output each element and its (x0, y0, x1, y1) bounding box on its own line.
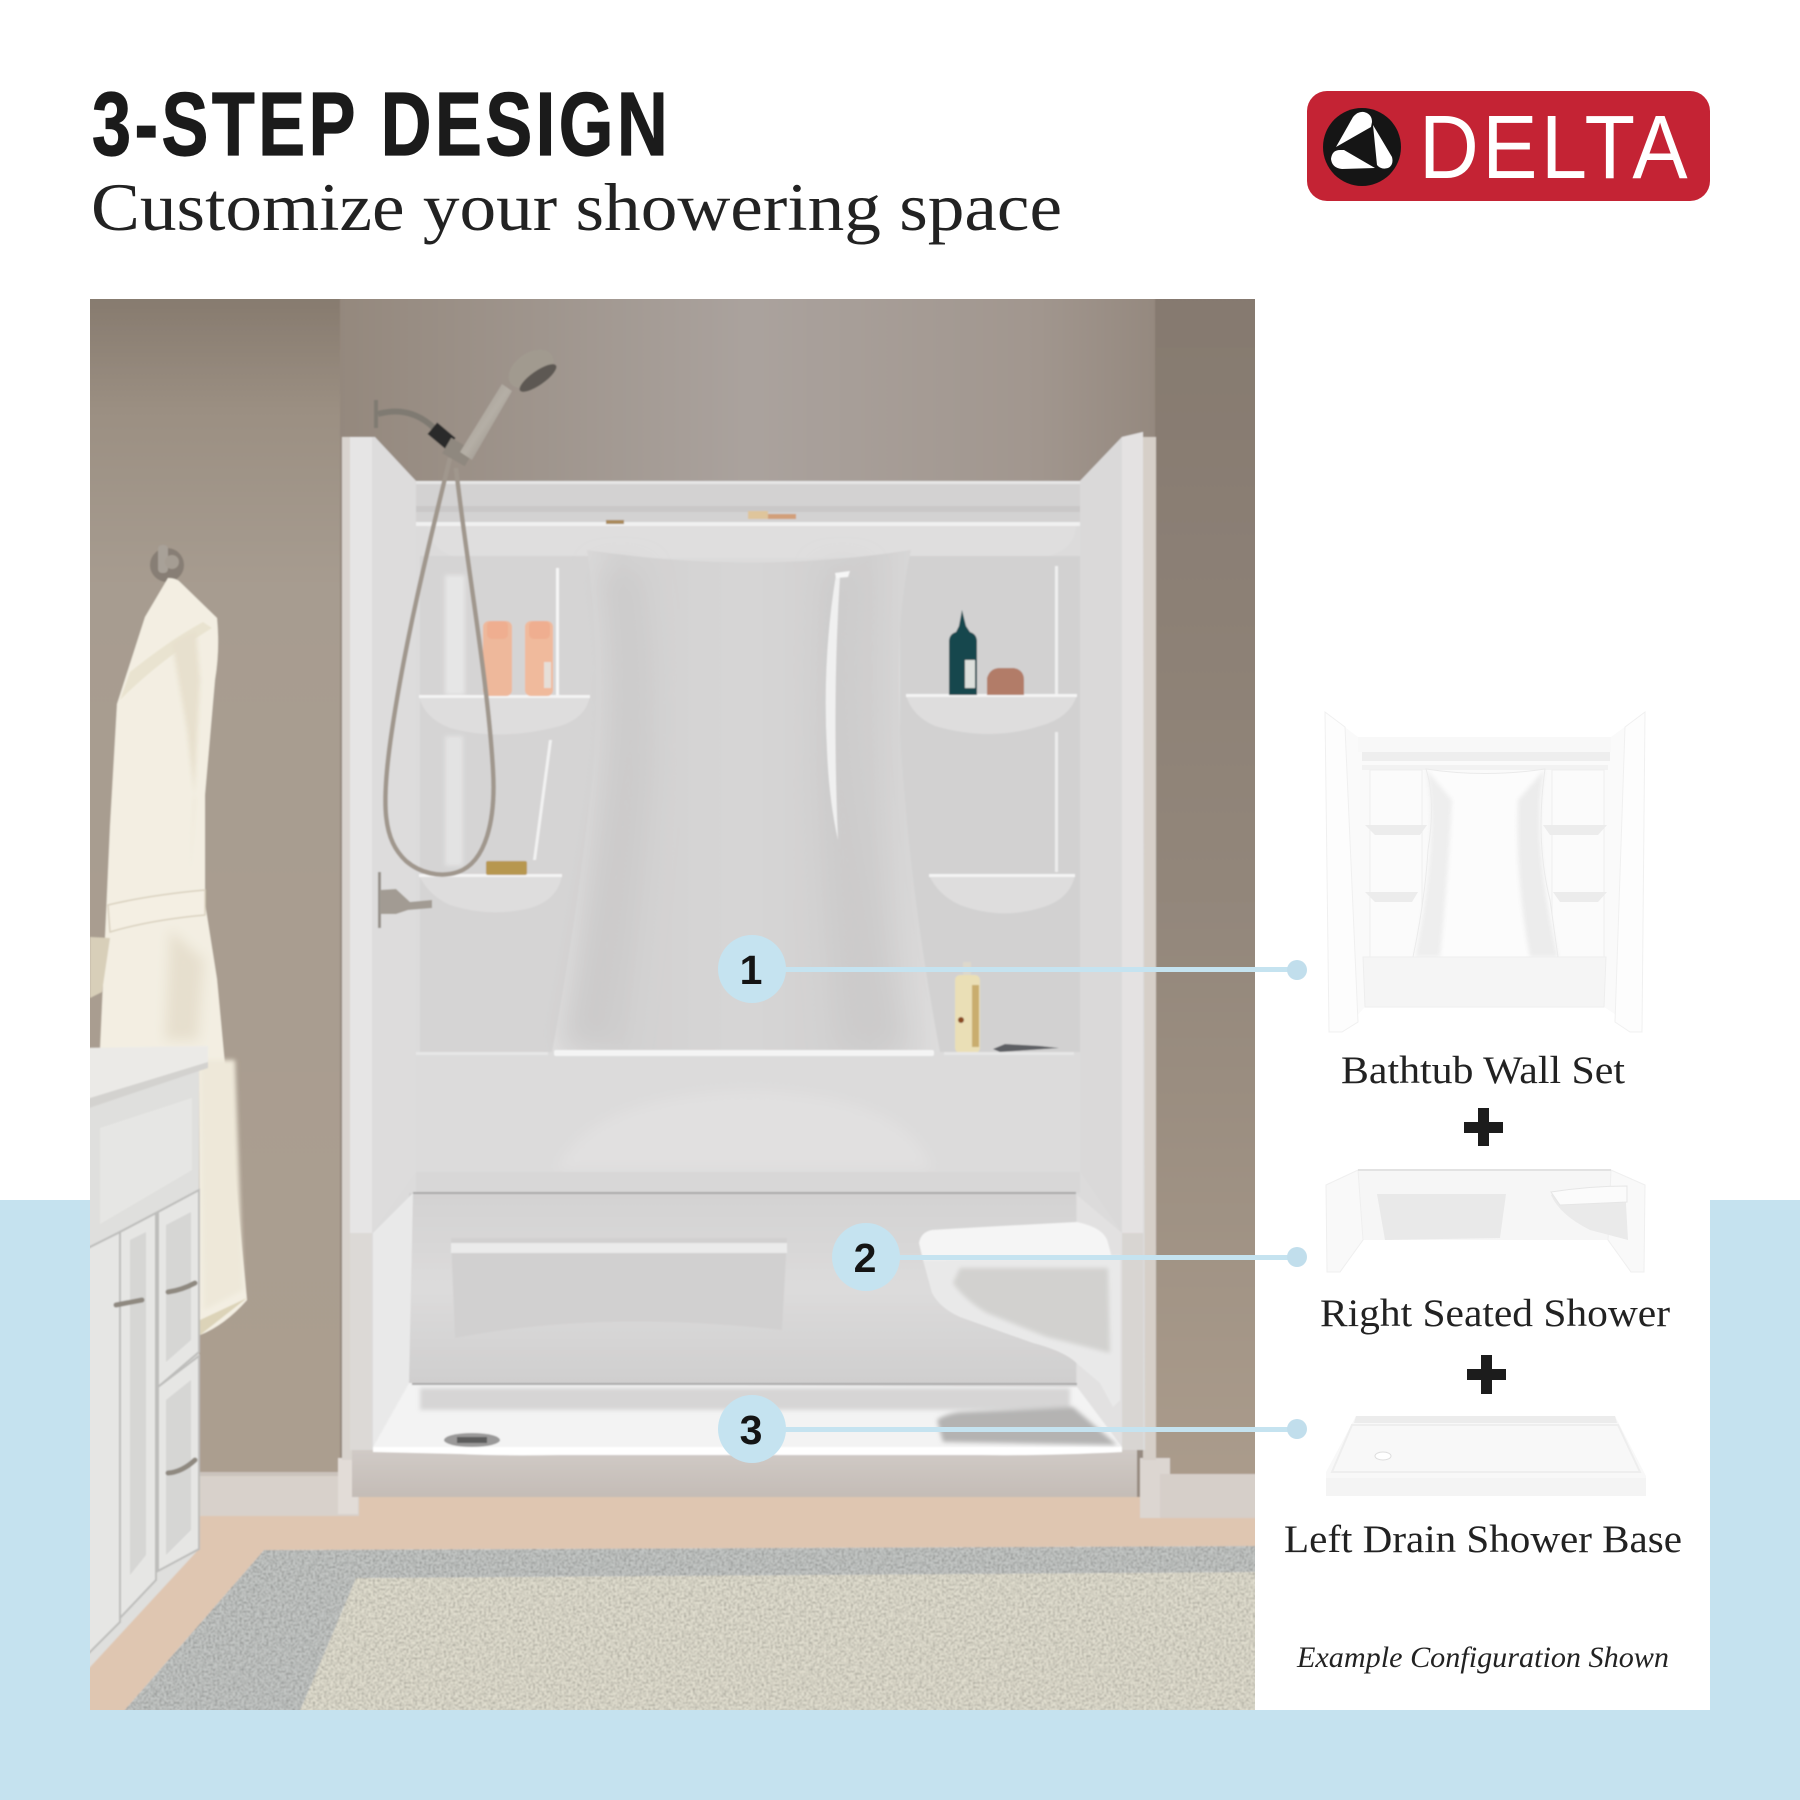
logo mark (1323, 108, 1401, 186)
panel highlights (566, 570, 850, 1046)
product: left drain shower base (1326, 1416, 1646, 1496)
right wall (1155, 299, 1255, 1475)
shower head (501, 342, 561, 396)
callout 2: 2 (854, 1235, 876, 1281)
label: right seated shower: Right Seated Shower (1320, 1292, 1670, 1335)
seat shower section (373, 1192, 1122, 1447)
handle (460, 384, 512, 460)
teal bottle (949, 610, 977, 695)
razor (993, 1044, 1059, 1052)
right flange (1122, 432, 1143, 1450)
hair clip (987, 668, 1024, 695)
left wall (80, 290, 345, 1500)
subtitle: Customize your showering space (91, 169, 1062, 245)
Delta logo (1307, 91, 1710, 201)
drain (444, 1433, 500, 1447)
vanity handles (116, 1283, 195, 1473)
shower base (352, 1383, 1137, 1497)
seat top (919, 1222, 1112, 1260)
light blue background band (0, 1200, 1800, 1800)
alcoves (1370, 770, 1422, 957)
bottles on upper left shelf (483, 621, 553, 696)
shelf left upper (419, 695, 590, 735)
back recess (451, 1238, 787, 1338)
shelf right lower (929, 874, 1075, 913)
items on ledge (767, 513, 797, 520)
vanity (80, 1046, 208, 1678)
robe on hook (90, 545, 247, 1335)
hook (150, 545, 184, 582)
label: left drain shower base: Left Drain Shower Base (1284, 1518, 1682, 1561)
shelf left lower (419, 874, 562, 912)
left alcove (460, 557, 586, 558)
outer trim (342, 437, 1156, 1460)
callout 3: 3 (740, 1407, 762, 1453)
shower hose (385, 458, 494, 875)
robe belt (108, 890, 205, 932)
plus sign 2 (1467, 1355, 1506, 1394)
vanity doors and drawers (80, 1190, 199, 1662)
collar (428, 423, 474, 466)
right return panel (1077, 1195, 1122, 1447)
baseboards (199, 1458, 1265, 1518)
left side wall (372, 437, 416, 1233)
panel: bathroom photo (80, 290, 1265, 1720)
callout 1: 1 (740, 947, 762, 993)
back wall upper ledge (416, 481, 1080, 526)
shower enclosure body (351, 432, 1145, 1450)
title: 3-STEP DESIGN (92, 75, 668, 175)
right side wall (1080, 437, 1122, 1233)
soap bar (486, 861, 527, 875)
caption: Example Configuration Shown (1296, 1641, 1669, 1674)
shower arm (378, 411, 462, 458)
corner seat (919, 1222, 1120, 1407)
shelf right upper (906, 694, 1077, 734)
valve (378, 872, 432, 928)
lower wall section (416, 1050, 1080, 1057)
plus sign 1 (1464, 1108, 1503, 1146)
product: right seated shower (1326, 1169, 1645, 1272)
alcove reflections (445, 566, 1058, 872)
callout 3 (718, 1395, 1307, 1463)
left flange (350, 437, 372, 1233)
center panel (552, 550, 940, 1052)
callout 1 (718, 935, 1307, 1003)
lotion bottle (955, 962, 980, 1053)
logo wordmark: DELTA (1419, 98, 1688, 198)
robe body (100, 578, 247, 1335)
flange (374, 400, 378, 428)
seat underside recess (953, 1268, 1110, 1353)
floor (80, 1497, 1265, 1720)
rug (116, 1546, 1265, 1720)
left return panel (373, 1193, 413, 1447)
seat shadow (937, 1407, 1117, 1445)
apron (352, 1450, 1137, 1497)
right alcove (900, 556, 1080, 1056)
vanity countertop (90, 1046, 208, 1099)
white side panel (1255, 299, 1710, 1710)
center wall (340, 290, 1160, 1500)
label: bathtub wall set: Bathtub Wall Set (1341, 1049, 1625, 1092)
product: bathtub wall set (1325, 712, 1645, 1032)
callout 2 (832, 1223, 1307, 1291)
